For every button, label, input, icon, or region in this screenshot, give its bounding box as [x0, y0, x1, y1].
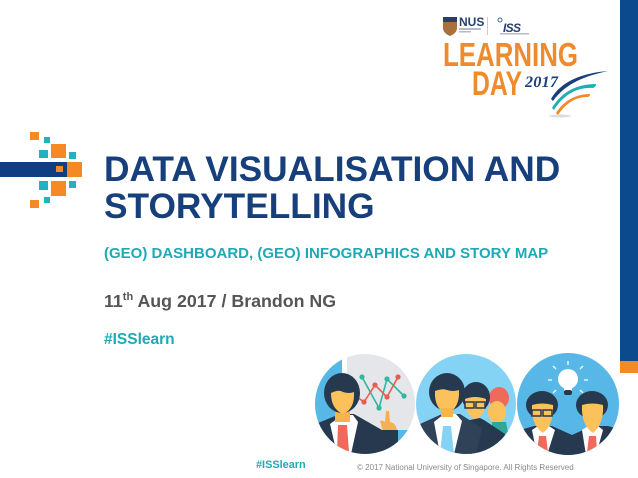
footer hashtag: #ISSlearn: [256, 459, 306, 471]
illustration: presenter with chart: [315, 354, 415, 454]
logo: Learning Day 2017: DAY: [472, 65, 522, 103]
hashtag: #ISSlearn: [104, 331, 175, 348]
logo: Learning Day 2017: [443, 36, 608, 118]
logo: NUS and ISS: ISS: [503, 21, 521, 35]
copyright: © 2017 National University of Singapore. All Rights Reserved: [357, 463, 574, 472]
logo: NUS and ISS: NUS: [459, 15, 484, 29]
date and speaker: 11th Aug 2017 / Brandon NG: [104, 291, 336, 311]
subtitle: (GEO) DASHBOARD, (GEO) INFOGRAPHICS AND STORY MAP: [104, 245, 548, 262]
logo: NUS and ISS: [443, 15, 529, 36]
title: DATA VISUALISATION AND: [104, 150, 560, 189]
title: STORYTELLING: [104, 187, 375, 226]
logo: Learning Day 2017: LEARNING: [443, 36, 578, 73]
illustration: two people with light bulb: [517, 353, 622, 455]
icon: arrow of squares: [0, 132, 82, 208]
illustration: team of three: [416, 354, 516, 456]
logo: Learning Day 2017: 2017: [524, 74, 559, 91]
title: [104, 150, 560, 226]
right edge bar: [620, 0, 638, 373]
